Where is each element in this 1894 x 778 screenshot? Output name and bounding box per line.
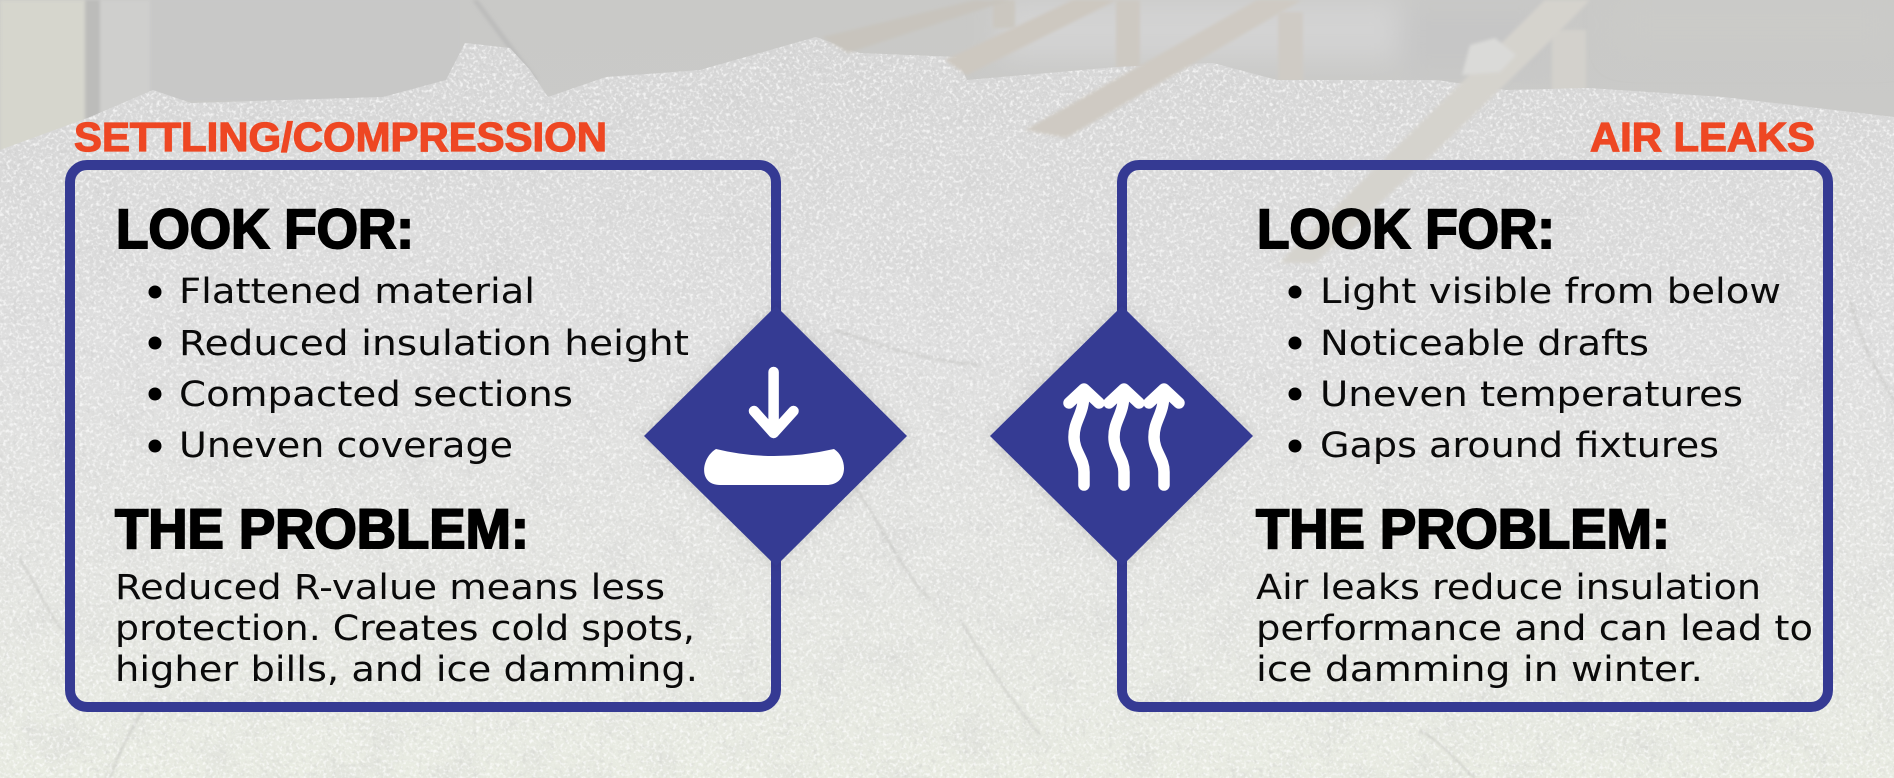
heading: the problem: THE PROBLEM: [115, 497, 529, 560]
icon: settling diamond [644, 306, 907, 566]
problem description [115, 568, 698, 690]
problem description: higher bills, and ice damming. [115, 650, 698, 690]
problem description: ice damming in winter. [1256, 650, 1703, 690]
bullet list [1288, 272, 1781, 466]
icon: air leaks diamond [990, 306, 1253, 566]
bullet list: Uneven temperatures [1320, 375, 1743, 415]
bullet list: Reduced insulation height [179, 324, 689, 364]
bullet list: Uneven coverage [179, 426, 513, 466]
panel: air leaks [1122, 114, 1828, 707]
problem description: Air leaks reduce insulation [1256, 568, 1761, 608]
bullet list: Noticeable drafts [1320, 324, 1649, 364]
heading: look for: LOOK FOR: [116, 197, 414, 260]
heading: look for: LOOK FOR: [1257, 197, 1555, 260]
bullet list: Gaps around fixtures [1320, 426, 1719, 466]
title: SETTLING/COMPRESSION [74, 114, 607, 160]
panel outline [70, 165, 776, 707]
problem description: protection. Creates cold spots, [115, 609, 695, 649]
title: AIR LEAKS [1590, 114, 1815, 160]
bullet list [148, 272, 689, 466]
problem description [1256, 568, 1813, 690]
bullet list: Flattened material [179, 272, 535, 312]
problem description: performance and can lead to [1256, 609, 1813, 649]
bullet list: Compacted sections [179, 375, 573, 415]
problem description: Reduced R-value means less [115, 568, 665, 608]
panel outline [1122, 165, 1828, 707]
panel: settling/compression [70, 114, 776, 707]
bullet list: Light visible from below [1320, 272, 1781, 312]
heading: the problem: THE PROBLEM: [1256, 497, 1670, 560]
